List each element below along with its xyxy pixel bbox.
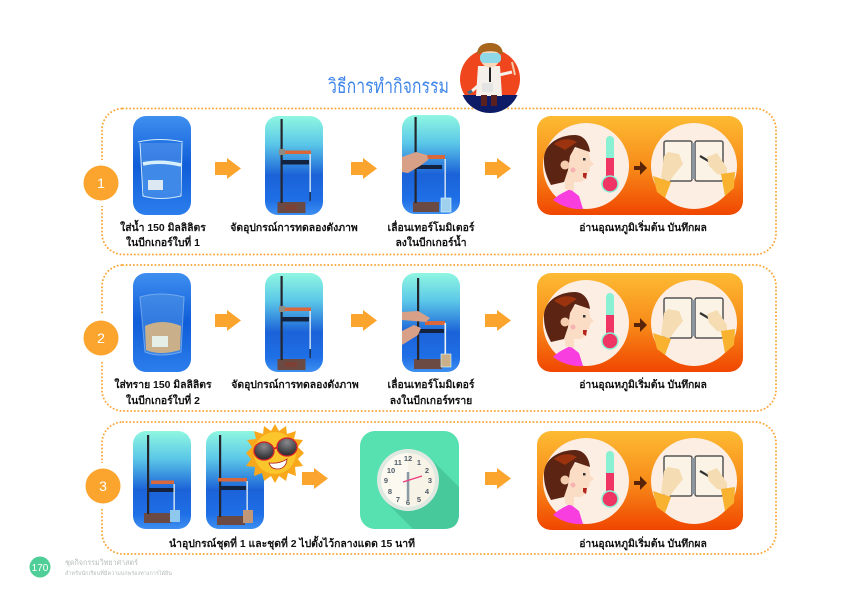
caption: อ่านอุณหภูมิเริ่มต้น บันทึกผล <box>579 220 707 235</box>
arrow <box>351 310 377 331</box>
icon: scientist <box>460 43 520 113</box>
arrow <box>485 468 511 489</box>
clock numerals: 4 <box>425 487 430 496</box>
caption: ลงในบีกเกอร์น้ำ <box>395 234 467 249</box>
clock numerals: 2 <box>425 466 429 475</box>
clock numerals: 9 <box>384 476 388 485</box>
footer text <box>65 558 172 577</box>
caption: อ่านอุณหภูมิเริ่มต้น บันทึกผล <box>579 377 707 392</box>
caption: ลงในบีกเกอร์ทราย <box>390 394 472 407</box>
photo: stand setup <box>265 273 323 372</box>
caption: เลื่อนเทอร์โมมิเตอร์ <box>388 220 475 234</box>
icon: sun with sunglasses <box>246 424 304 483</box>
footer text: สำหรับนักเรียนที่มีความบกพร่องทางการได้ยิน <box>65 569 172 577</box>
clock numerals: 5 <box>417 495 421 504</box>
clock numerals: 7 <box>396 495 400 504</box>
caption: อ่านอุณหภูมิเริ่มต้น บันทึกผล <box>579 536 707 551</box>
step 2 number badge <box>84 315 118 361</box>
clock numerals: 1 <box>417 458 421 467</box>
panel: step 1 <box>84 108 776 254</box>
arrow <box>351 158 377 179</box>
arrow <box>215 310 241 331</box>
photo: beaker of water <box>133 116 191 215</box>
panel: step 2 <box>84 265 776 411</box>
arrow <box>215 158 241 179</box>
step 2 number badge: 2 <box>97 330 105 346</box>
caption: ในบีกเกอร์ใบที่ 2 <box>126 393 200 407</box>
photo: lowering thermometer into water <box>402 115 460 214</box>
photo: setup 1 in sun <box>133 431 191 529</box>
caption: นำอุปกรณ์ชุดที่ 1 และชุดที่ 2 ไปตั้งไว้กลางแดด 15 นาที <box>169 535 415 551</box>
illustration: read thermometer and record <box>537 273 743 372</box>
clock numerals: 6 <box>406 498 410 507</box>
caption: เลื่อนเทอร์โมมิเตอร์ <box>388 377 475 391</box>
footer page number: 170 <box>32 563 49 574</box>
caption: จัดอุปกรณ์การทดลองดังภาพ <box>230 221 358 235</box>
clock numerals: 11 <box>394 458 402 467</box>
clock numerals: 10 <box>387 466 395 475</box>
arrow <box>302 468 328 489</box>
caption: จัดอุปกรณ์การทดลองดังภาพ <box>231 378 359 392</box>
footer page number <box>30 556 50 578</box>
step 3 number badge: 3 <box>99 478 107 494</box>
arrow <box>485 310 511 331</box>
clock numerals: 8 <box>388 487 392 496</box>
caption: ในบีกเกอร์ใบที่ 1 <box>126 235 200 249</box>
photo: lowering thermometer into sand <box>402 273 460 372</box>
clock numerals <box>384 454 432 507</box>
clock numerals: 12 <box>404 454 412 463</box>
title: วิธีการทำกิจกรรม <box>328 76 449 98</box>
step 1 number badge <box>84 160 118 206</box>
photo: stand setup <box>265 116 323 215</box>
step 3 number badge <box>86 463 120 509</box>
icon: clock <box>360 431 459 529</box>
caption: ใส่ทราย 150 มิลลิลิตร <box>114 378 212 391</box>
caption: ใส่น้ำ 150 มิลลิลิตร <box>120 219 206 234</box>
photo: beaker of sand <box>133 273 191 372</box>
arrow <box>485 158 511 179</box>
illustration: read thermometer and record <box>537 431 743 530</box>
panel: step 3 <box>86 422 776 554</box>
illustration: read thermometer and record <box>537 116 743 215</box>
footer text: ชุดกิจกรรมวิทยาศาสตร์ <box>65 558 138 567</box>
clock numerals: 3 <box>428 476 432 485</box>
photo: setup 2 in sun <box>206 431 264 529</box>
step 1 number badge: 1 <box>97 175 105 191</box>
